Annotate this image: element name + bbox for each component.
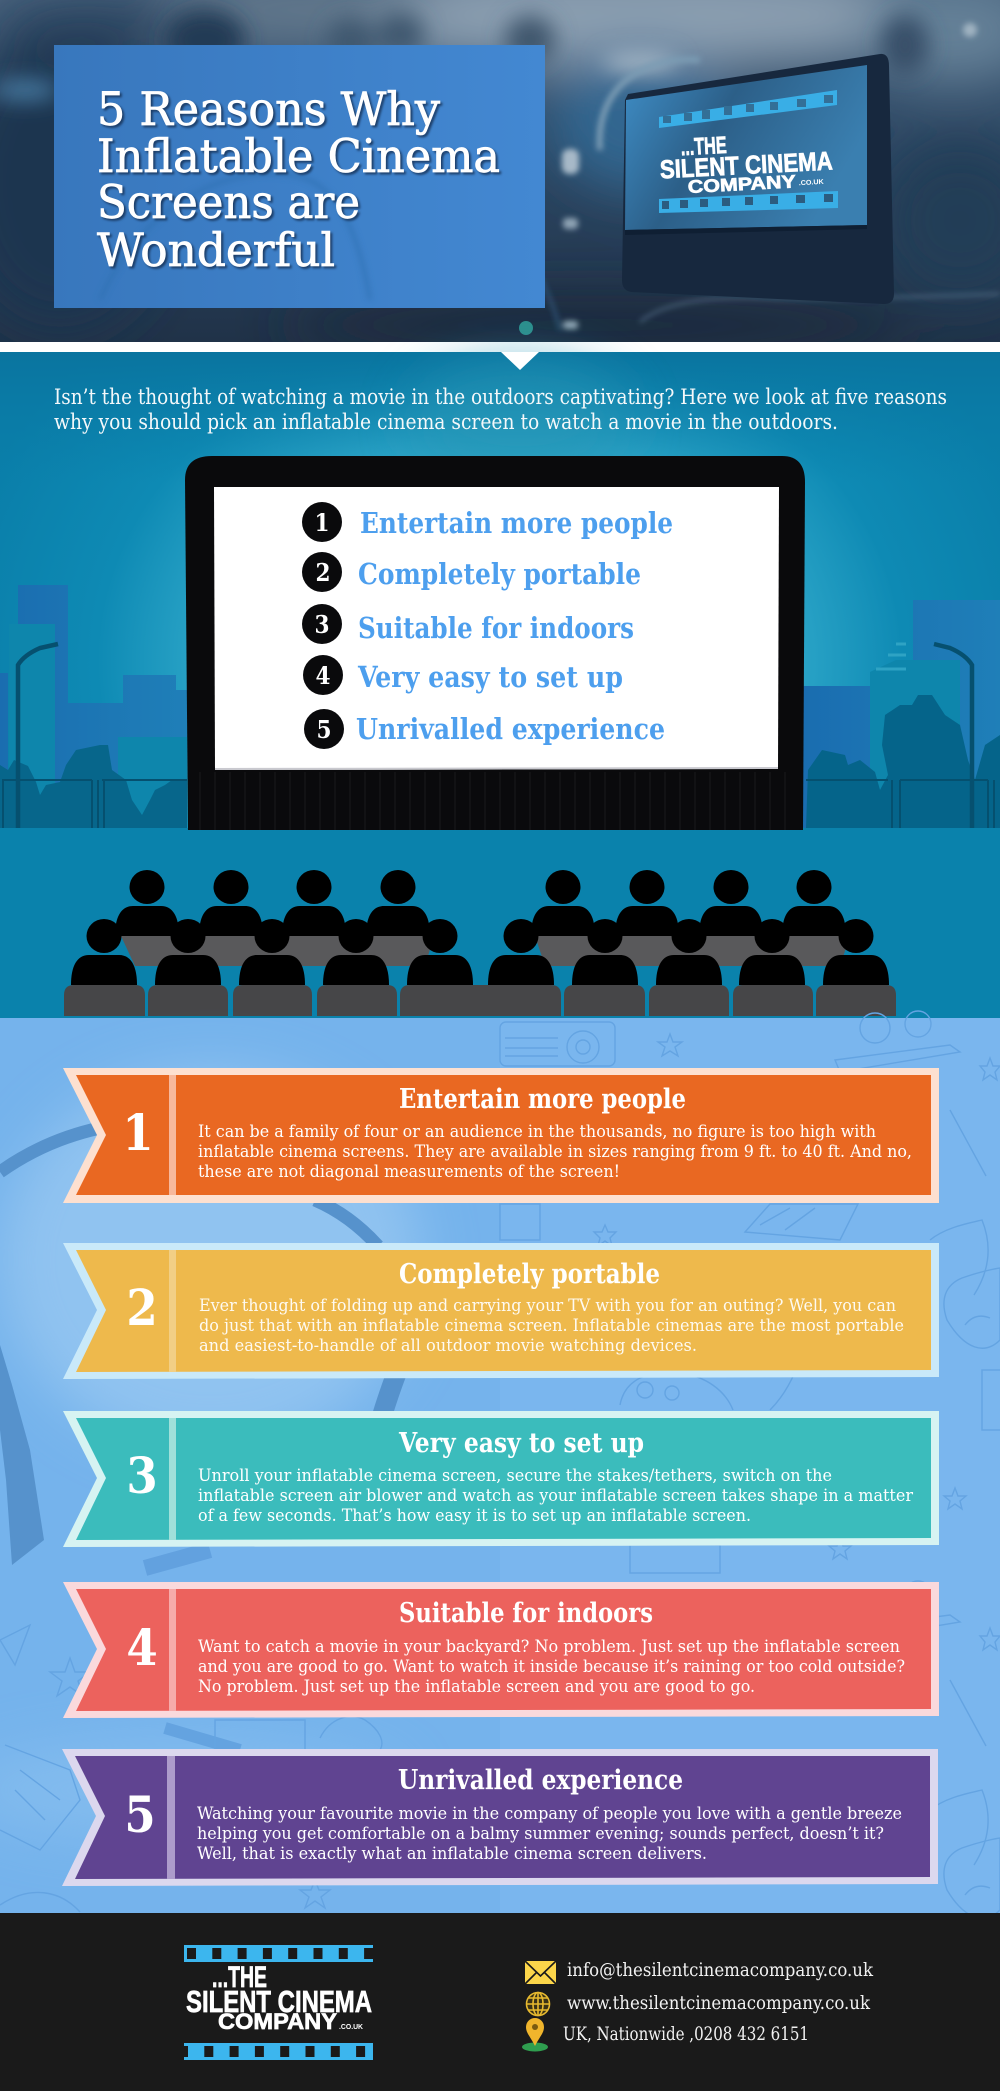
panel: light blue background with film doodles — [0, 1011, 1000, 2091]
skyline right — [803, 600, 1000, 828]
number 5: 5 — [124, 1785, 156, 1844]
title: Screens are — [97, 175, 360, 229]
arrow: pointer under hero — [501, 352, 539, 370]
list item 2: Completely portable — [358, 557, 641, 591]
intro text — [54, 385, 947, 434]
number 2: 2 — [126, 1278, 158, 1337]
wordmark — [186, 1961, 372, 2034]
heading 4: Suitable for indoors — [399, 1598, 653, 1629]
icon: teal light dot — [519, 321, 533, 335]
contact website: www.thesilentcinemacompany.co.uk — [567, 1992, 871, 2014]
heading 1: Entertain more people — [399, 1084, 686, 1115]
icon: location pin — [522, 2018, 548, 2052]
list item 2: 2 — [315, 558, 331, 587]
number 3: 3 — [126, 1446, 158, 1505]
body text 2: Ever thought of folding up and carrying your TV with you for an outing? Well, you can — [199, 1296, 896, 1315]
title: Wonderful — [97, 223, 335, 277]
intro text: why you should pick an inflatable cinema screen to watch a movie in the outdoors. — [54, 410, 838, 434]
list item 4 — [303, 655, 623, 695]
body text 5: Well, that is exactly what an inflatable cinema screen delivers. — [197, 1844, 707, 1863]
film strip bottom — [184, 2043, 373, 2060]
body text 3: inflatable screen air blower and watch as your inflatable screen takes shape in a matter — [198, 1486, 914, 1505]
body text 5: Watching your favourite movie in the company of people you love with a gentle breeze — [197, 1804, 902, 1823]
body text 1: It can be a family of four or an audience in the thousands, no figure is too high with — [198, 1122, 876, 1141]
icon: street lamp right — [934, 644, 972, 828]
list item 1: 1 — [314, 508, 330, 537]
film doodles right — [500, 1011, 1000, 2091]
body text 2 — [199, 1296, 904, 1355]
title: 5 Reasons Why — [97, 82, 441, 136]
film doodles left — [0, 1625, 382, 1912]
body text 3: of a few seconds. That’s how easy it is to set up an inflatable screen. — [198, 1506, 751, 1525]
wordmark: .CO.UK — [339, 2024, 363, 2031]
icon: envelope — [525, 1961, 556, 1984]
ribbon 1: entertain more people — [63, 1068, 939, 1203]
logo: silent cinema wordmark — [658, 126, 834, 198]
logo: silent cinema wordmark: .CO.UK — [799, 179, 824, 187]
body text 1 — [198, 1122, 912, 1181]
body text 2: do just that with an inflatable cinema screen. Inflatable cinemas are the most portable — [199, 1316, 904, 1335]
inflatable screen with company logo — [622, 54, 894, 304]
body text 4: No problem. Just set up the inflatable screen and you are good to go. — [198, 1677, 755, 1696]
contact location and phone: UK, Nationwide ,0208 432 6151 — [563, 2023, 809, 2045]
ribbon 2: completely portable — [63, 1243, 939, 1379]
skyline left — [0, 585, 187, 828]
wordmark: ...THE — [212, 1961, 267, 1994]
body text 2: and easiest-to-handle of all outdoor movie watching devices. — [199, 1336, 697, 1355]
number 1: 1 — [122, 1103, 154, 1162]
wordmark: COMPANY — [218, 2009, 337, 2034]
logo: silent cinema wordmark: SILENT CINEMA — [659, 145, 834, 184]
hero panel: cinema audience photo — [0, 0, 1000, 355]
footer panel — [0, 1913, 1000, 2091]
film reel rings — [0, 1128, 397, 1750]
inflatable movie screen — [185, 456, 805, 830]
ribbon 4: suitable for indoors — [63, 1582, 939, 1718]
number 4: 4 — [126, 1618, 158, 1677]
heading 3: Very easy to set up — [398, 1428, 644, 1459]
panel: teal screening scene — [0, 352, 1000, 1018]
body text 4: Want to catch a movie in your backyard? No problem. Just set up the inflatable screen — [198, 1637, 900, 1656]
audience silhouettes in seats — [64, 870, 896, 1016]
logo: silent cinema wordmark: ...THE — [680, 132, 727, 161]
title box — [54, 45, 545, 308]
ribbon 3: very easy to set up — [63, 1411, 939, 1547]
intro text: Isn’t the thought of watching a movie in the outdoors captivating? Here we look at five reasons — [54, 385, 947, 409]
body text 1: inflatable cinema screens. They are available in sizes ranging from 9 ft. to 40 ft. And no, — [198, 1142, 912, 1161]
body text 4 — [198, 1637, 905, 1696]
icon: globe — [526, 1992, 550, 2016]
body text 3 — [198, 1466, 914, 1525]
ribbon 5: unrivalled experience — [62, 1749, 938, 1886]
white divider band — [0, 342, 1000, 352]
logo: silent cinema wordmark: COMPANY — [687, 171, 796, 197]
list item 3 — [302, 604, 634, 645]
heading 2: Completely portable — [399, 1259, 660, 1290]
contact email: info@thesilentcinemacompany.co.uk — [567, 1959, 874, 1981]
icon: street lamp left — [18, 644, 58, 828]
list item 5: 5 — [316, 715, 332, 744]
list item 1: Entertain more people — [360, 506, 673, 540]
wordmark: SILENT CINEMA — [186, 1984, 372, 2019]
body text 1: these are not diagonal measurements of the screen! — [198, 1162, 620, 1181]
list item 1 — [302, 502, 673, 542]
list item 4: 4 — [315, 661, 331, 690]
body text 5 — [197, 1804, 902, 1863]
heading 5: Unrivalled experience — [398, 1765, 683, 1796]
list item 2 — [302, 552, 641, 592]
list item 4: Very easy to set up — [357, 660, 623, 694]
logo: film strip top — [659, 90, 837, 128]
logo: film strip bottom — [659, 191, 838, 213]
title — [97, 82, 500, 277]
list item 3: Suitable for indoors — [358, 611, 634, 645]
film strip top — [184, 1945, 373, 1962]
list item 5: Unrivalled experience — [356, 712, 665, 746]
list item 3: 3 — [314, 610, 330, 639]
body text 3: Unroll your inflatable cinema screen, secure the stakes/tethers, switch on the — [198, 1466, 832, 1485]
title: Inflatable Cinema — [97, 129, 500, 183]
footer logo — [184, 1945, 373, 2060]
body text 4: and you are good to go. Want to watch it inside because it’s raining or too cold outside? — [198, 1657, 905, 1676]
body text 5: helping you get comfortable on a balmy summer evening; sounds perfect, doesn’t it? — [197, 1824, 884, 1843]
